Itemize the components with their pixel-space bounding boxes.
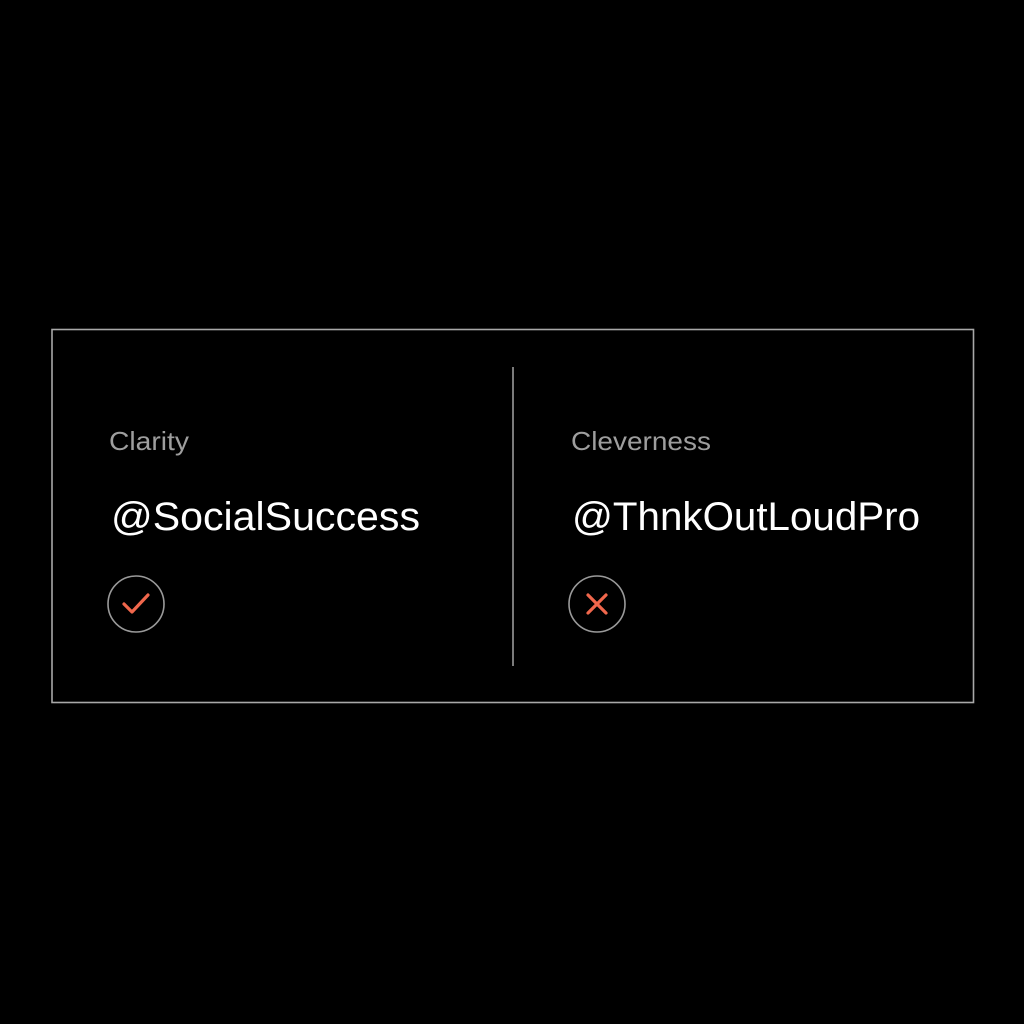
heading: Clarity: Clarity: [109, 426, 189, 456]
heading: Cleverness: Cleverness: [571, 426, 711, 456]
icon: check mark: [108, 576, 164, 632]
panel: comparison frame: [52, 330, 974, 702]
panel: cleverness column: [569, 426, 920, 632]
panel: clarity column: [108, 426, 420, 632]
text: @SocialSuccess: @SocialSuccess: [111, 495, 420, 539]
text: @ThnkOutLoudPro: @ThnkOutLoudPro: [572, 495, 920, 539]
icon: cross mark: [569, 576, 625, 632]
